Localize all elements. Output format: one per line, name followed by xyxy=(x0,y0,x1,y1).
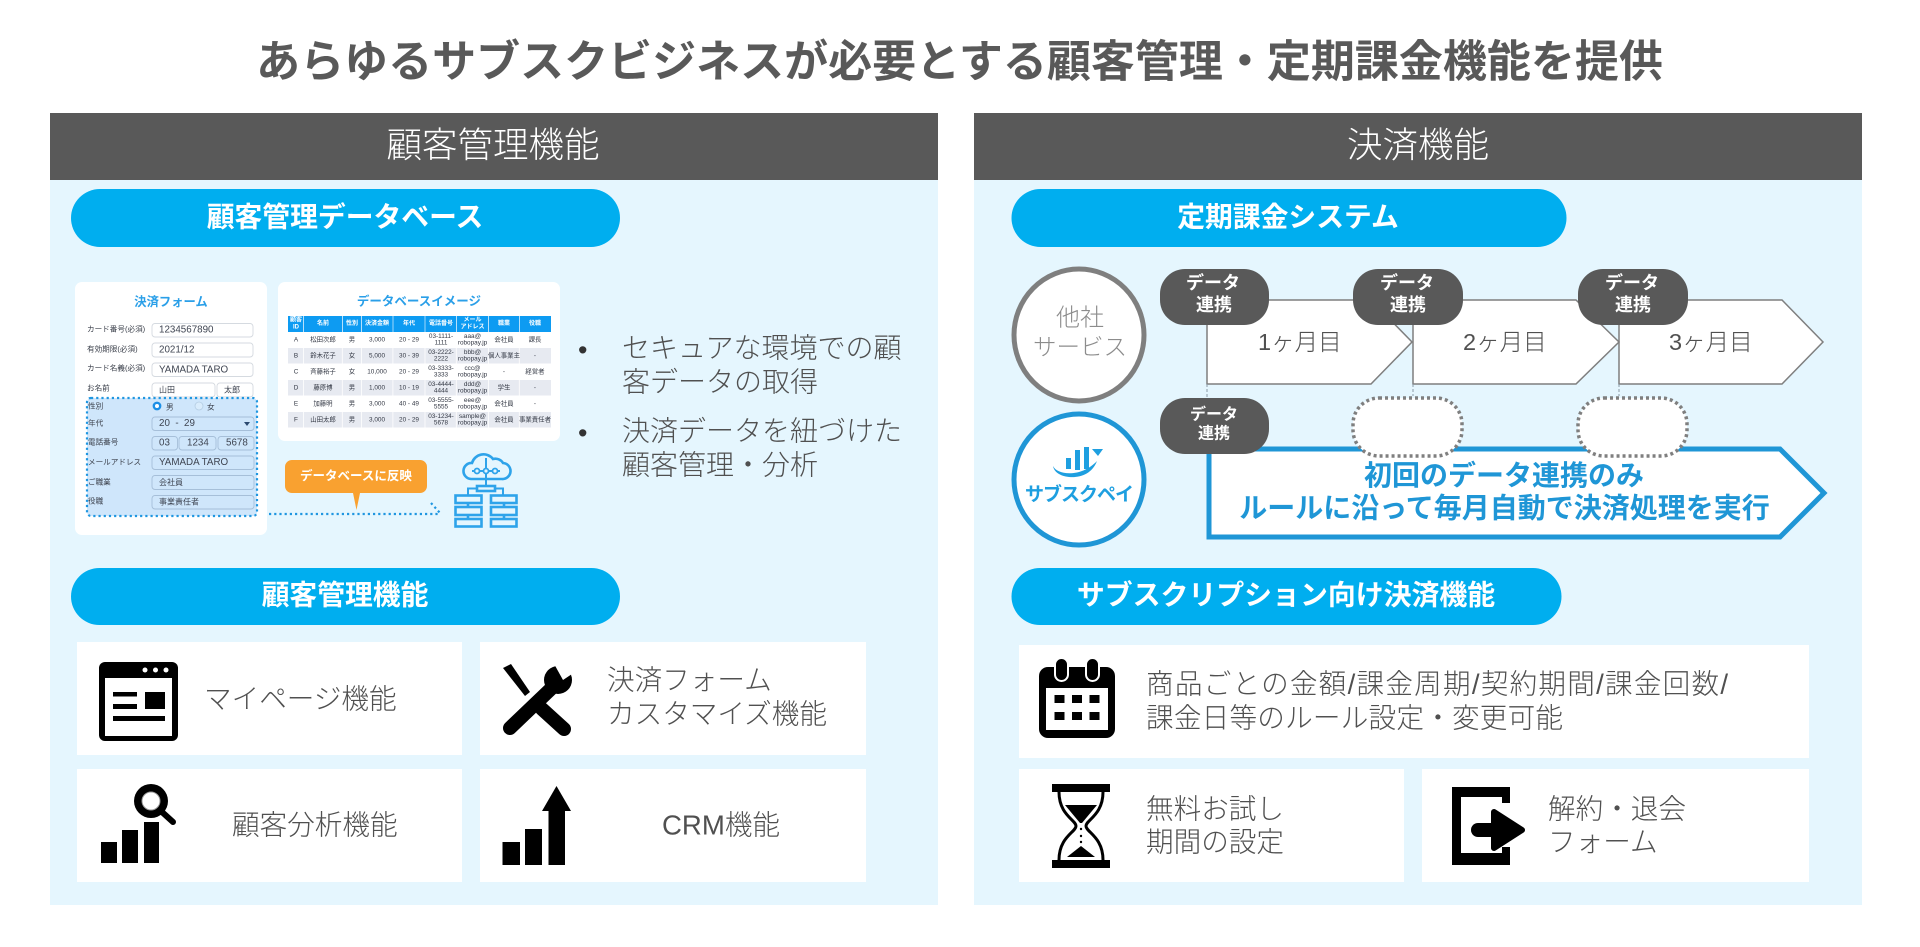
table: 会社員 xyxy=(494,414,514,424)
data sync pill: first xyxy=(1160,398,1269,454)
table: A xyxy=(294,336,299,344)
table: ccc@ xyxy=(464,365,481,372)
diagram: other services row: 2ヶ月目 xyxy=(1463,329,1547,355)
feature: cancellation form xyxy=(1422,769,1809,882)
highlighted form fields: ご職業 xyxy=(88,476,111,486)
table: 3,000 xyxy=(369,400,385,408)
feature: rule settings xyxy=(1019,645,1809,758)
table: 3,000 xyxy=(369,416,385,424)
database image card xyxy=(278,282,560,441)
form screenshot card: 決済フォーム xyxy=(134,294,208,309)
heading pill: subscription payment features xyxy=(1012,568,1562,625)
table: 事業責任者 xyxy=(519,414,552,424)
subscpay logo circle xyxy=(1014,414,1144,545)
form screenshot card: 太郎 xyxy=(224,384,240,394)
panel: payment xyxy=(974,113,1862,905)
database image card: データベースイメージ xyxy=(357,294,481,308)
automatic billing arrow xyxy=(1209,449,1824,537)
highlighted form fields: YAMADA TARO xyxy=(159,457,229,468)
form screenshot card: お名前 xyxy=(87,382,110,392)
table: robopay.jp xyxy=(458,340,488,346)
table: 年代 xyxy=(403,319,415,327)
table: aaa@ xyxy=(464,333,481,340)
table: F xyxy=(294,416,298,424)
highlighted form fields: 年代 xyxy=(88,418,104,428)
table: 役職 xyxy=(529,319,541,327)
feature: rule settings: 商品ごとの金額/課金周期/契約期間/課金回数/ xyxy=(1146,668,1728,700)
table: - xyxy=(503,368,505,376)
diagram: subscpay row xyxy=(1014,398,1824,545)
table: 男 xyxy=(349,384,355,392)
data sync pills xyxy=(1160,269,1688,325)
highlighted form fields: 1234 xyxy=(187,438,209,448)
table: 斉藤裕子 xyxy=(310,366,336,376)
form screenshot card: 2021/12 xyxy=(159,344,194,356)
icon: browser window xyxy=(99,662,178,741)
feature: my page: マイページ機能 xyxy=(204,684,397,714)
icon: logo mark xyxy=(1053,447,1103,477)
feature: free trial xyxy=(1019,769,1404,882)
bullet list xyxy=(578,332,902,480)
table: C xyxy=(294,368,299,376)
title: あらゆるサブスクビジネスが必要とする顧客管理・定期課金機能を提供 xyxy=(256,38,1663,86)
form screenshot card: 山田 xyxy=(159,386,175,394)
table: sample@ xyxy=(459,413,486,420)
highlighted form fields: メールアドレス xyxy=(88,458,141,466)
highlighted form fields: 事業責任者 xyxy=(159,496,199,506)
panel: customer management xyxy=(50,113,938,905)
icon: exit door xyxy=(1452,787,1522,865)
table: 男 xyxy=(349,400,355,408)
table: - xyxy=(534,384,536,392)
callout: reflected in database: データベースに反映 xyxy=(300,468,412,483)
table: 男 xyxy=(349,336,355,344)
feature: cancellation form: 解約・退会 xyxy=(1548,794,1686,824)
table: robopay.jp xyxy=(458,404,488,410)
table: ddd@ xyxy=(464,381,481,388)
other services circle: 他社 xyxy=(1056,304,1104,332)
heading pill: recurring billing: 定期課金システム xyxy=(1177,202,1399,232)
highlighted form fields: 男 xyxy=(166,402,174,412)
form screenshot card: 1234567890 xyxy=(159,324,214,336)
feature: my page xyxy=(77,642,462,755)
icon: cloud database xyxy=(456,454,516,526)
dotted arrow: form to database xyxy=(269,503,440,514)
automatic billing arrow: ルールに沿って毎月自動で決済処理を実行 xyxy=(1239,492,1770,524)
panel header: customer management xyxy=(50,113,938,180)
table: robopay.jp xyxy=(458,372,488,378)
feature: cancellation form: フォーム xyxy=(1548,826,1658,858)
icon: wrench and screwdriver xyxy=(503,660,575,729)
feature: rule settings: 課金日等のルール設定・変更可能 xyxy=(1146,702,1563,734)
table: 山田太郎 xyxy=(310,414,336,424)
diagram: other services row: 1ヶ月目 xyxy=(1258,329,1342,355)
table: - xyxy=(534,352,536,360)
highlighted form fields: 20 - 29 xyxy=(159,418,195,429)
feature: payment form customize: カスタマイズ機能 xyxy=(607,698,827,730)
table: 03-5555- xyxy=(428,397,454,404)
heading pill: customer database xyxy=(71,189,620,247)
table: 男 xyxy=(349,416,355,424)
highlighted form fields: 女 xyxy=(207,402,215,412)
bullet list: 客データの取得 xyxy=(622,366,818,398)
table: 03-4444- xyxy=(428,381,454,388)
highlighted form fields: 電話番号 xyxy=(88,436,119,446)
table: 3333 xyxy=(434,372,449,378)
table: - xyxy=(534,400,536,408)
table: メール xyxy=(463,316,482,324)
table: bbb@ xyxy=(464,349,481,356)
table: 女 xyxy=(349,350,356,360)
table: 藤原博 xyxy=(313,382,333,392)
data sync pills: 連携 xyxy=(1196,295,1232,315)
table: 個人事業主 xyxy=(488,350,521,360)
icon: chart with arrow xyxy=(502,786,571,865)
table: 性別 xyxy=(346,319,358,327)
table: 03-1234- xyxy=(428,413,454,420)
table: 1111 xyxy=(435,340,448,346)
table: robopay.jp xyxy=(458,356,488,362)
table: 30 - 39 xyxy=(399,352,419,360)
month arrows xyxy=(1207,300,1823,384)
icon: hourglass xyxy=(1052,784,1110,868)
automatic billing arrow: 初回のデータ連携のみ xyxy=(1364,459,1644,491)
table: 加藤明 xyxy=(313,398,333,408)
form screenshot card xyxy=(75,282,267,535)
bullet list: 決済データを紐づけた xyxy=(622,416,902,446)
bullet list: 顧客管理・分析 xyxy=(622,450,818,480)
data sync pills: データ xyxy=(1186,272,1240,293)
table: 4444 xyxy=(434,388,449,394)
feature: free trial: 無料お試し xyxy=(1146,794,1284,824)
highlighted form fields: 5678 xyxy=(226,438,248,448)
guide lines xyxy=(1207,384,1619,398)
highlighted form fields: 会社員 xyxy=(159,477,183,487)
panel header: customer management: 顧客管理機能 xyxy=(386,125,600,165)
table: eee@ xyxy=(464,397,481,404)
data sync pill: first: 連携 xyxy=(1198,424,1230,442)
table: 会社員 xyxy=(494,334,514,344)
table: 2222 xyxy=(434,356,449,362)
heading pill: recurring billing xyxy=(1012,189,1566,247)
table: 3,000 xyxy=(369,336,385,344)
table: 名前 xyxy=(317,319,329,327)
icon: calendar xyxy=(1039,658,1115,738)
table: 20 - 29 xyxy=(399,336,419,344)
table xyxy=(288,316,552,428)
feature: customer analysis xyxy=(77,769,462,882)
table: robopay.jp xyxy=(458,420,488,426)
table: 課長 xyxy=(529,336,542,344)
table: 学生 xyxy=(498,382,511,392)
icon: chart with magnifier xyxy=(101,784,173,863)
feature: free trial: 期間の設定 xyxy=(1146,826,1284,858)
table: B xyxy=(294,352,298,360)
data sync pill: first: データ xyxy=(1190,404,1238,424)
heading pill: customer database: 顧客管理データベース xyxy=(207,202,483,232)
table: 松田次郎 xyxy=(310,334,336,344)
table: 鈴木花子 xyxy=(310,350,336,360)
highlighted form fields: 性別 xyxy=(88,400,103,410)
highlighted form fields xyxy=(87,398,257,516)
data sync pills: データ xyxy=(1380,272,1434,293)
panel header: payment: 決済機能 xyxy=(1347,125,1489,165)
form screenshot card: YAMADA TARO xyxy=(159,364,229,376)
heading pill: customer management features: 顧客管理機能 xyxy=(262,580,429,610)
table: 会社員 xyxy=(494,398,514,408)
table: E xyxy=(294,400,298,408)
panel header: payment xyxy=(974,113,1862,180)
feature: payment form customize: 決済フォーム xyxy=(607,664,772,696)
table: 5678 xyxy=(434,420,449,426)
dotted pills: no sync needed xyxy=(1353,398,1687,456)
table: 1,000 xyxy=(369,384,385,392)
table: 決済金額 xyxy=(365,319,389,327)
bullet list: • xyxy=(578,335,587,365)
table: ID xyxy=(293,324,300,330)
table: 職業 xyxy=(498,319,510,327)
feature: CRM: CRM機能 xyxy=(662,810,780,840)
subscpay logo circle: サブスクペイ xyxy=(1025,482,1134,506)
table: 03-1111- xyxy=(429,333,453,340)
form screenshot card: 有効期限(必須) xyxy=(87,344,138,354)
table: 5555 xyxy=(434,404,449,410)
data sync pills: データ xyxy=(1605,272,1659,293)
table: 20 - 29 xyxy=(399,416,419,424)
other services circle xyxy=(1014,269,1144,401)
table: 5,000 xyxy=(369,352,385,360)
bullet list: • xyxy=(578,418,587,448)
table: 03-3333- xyxy=(428,365,454,372)
table: robopay.jp xyxy=(458,388,488,394)
highlighted form fields: 役職 xyxy=(88,496,104,506)
table: 10 - 19 xyxy=(399,384,419,392)
other services circle: サービス xyxy=(1033,334,1127,360)
table: D xyxy=(294,384,299,392)
form screenshot card: カード名義(必須) xyxy=(87,362,146,372)
table: 経営者 xyxy=(525,366,545,376)
heading pill: customer management features xyxy=(71,568,620,625)
table: アドレス xyxy=(460,324,485,330)
diagram: other services row xyxy=(1014,269,1823,401)
feature: customer analysis: 顧客分析機能 xyxy=(232,810,398,840)
diagram: other services row: 3ヶ月目 xyxy=(1669,329,1753,355)
data sync pills: 連携 xyxy=(1615,295,1651,315)
table: 女 xyxy=(349,366,356,376)
feature: CRM xyxy=(480,769,866,882)
table: 20 - 29 xyxy=(399,368,419,376)
data sync pills: 連携 xyxy=(1390,295,1426,315)
table: 40 - 49 xyxy=(399,400,419,408)
bullet list: セキュアな環境での顧 xyxy=(622,332,901,364)
table: 顧客 xyxy=(290,316,302,324)
table: 電話番号 xyxy=(429,319,453,327)
highlighted form fields: 03 xyxy=(159,438,170,448)
table: 10,000 xyxy=(367,368,387,376)
feature: payment form customize xyxy=(480,642,866,755)
callout: reflected in database xyxy=(285,460,427,510)
heading pill: subscription payment features: サブスクリプション向け決済機能 xyxy=(1077,578,1495,610)
table: 03-2222- xyxy=(428,349,454,356)
form screenshot card: カード番号(必須) xyxy=(87,324,146,334)
